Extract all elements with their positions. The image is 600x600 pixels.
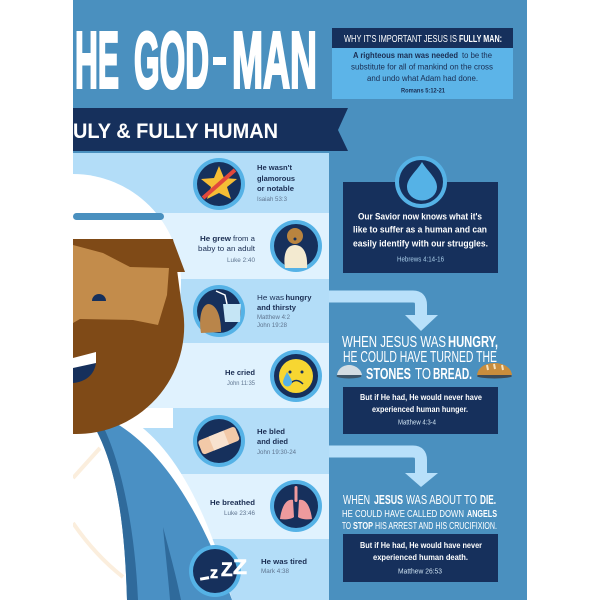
heading: hungry	[342, 336, 498, 379]
callout: death	[343, 534, 498, 582]
row 2: grew: baby to an adult	[198, 244, 256, 253]
heading: hungry: BREAD.	[433, 366, 472, 383]
heading: hungry: HE COULD HAVE TURNED THE	[343, 349, 497, 366]
callout: our savior	[343, 156, 498, 273]
row 6: breathed	[210, 480, 322, 532]
callout: our savior: Hebrews 4:14-16	[397, 256, 444, 264]
callout: death: experienced human death.	[373, 552, 468, 562]
beard	[73, 239, 184, 434]
eye	[92, 294, 106, 301]
heading: about to die: HIS ARREST AND HIS CRUCIFIXION.	[375, 521, 497, 532]
row 2: grew: Luke 2:40	[227, 257, 255, 264]
row 2: grew: from a	[233, 234, 256, 243]
row 4: cried: He cried	[225, 368, 255, 377]
heading: about to die: WAS ABOUT TO	[406, 492, 477, 507]
blue page background	[73, 0, 527, 600]
face skin	[73, 245, 169, 325]
heading: about to die: ANGELS	[467, 508, 497, 520]
callout: death: Matthew 26:53	[398, 568, 442, 576]
callout: our savior: easily identify with our struggles.	[353, 238, 488, 250]
callout: our savior: like to suffer as a human and can	[353, 224, 487, 236]
heading: about to die: DIE.	[480, 492, 496, 507]
sash	[95, 421, 232, 600]
turban	[73, 174, 181, 295]
arrow: hungry	[329, 296, 438, 331]
banner: ULY & FULLY HUMAN	[73, 120, 278, 143]
icon: bandage	[193, 415, 245, 467]
title: HE	[75, 16, 119, 104]
panel body: to be the	[462, 51, 493, 60]
icon: sleeping zzz: Z	[221, 560, 233, 581]
panel body: Romans 5:12-21	[401, 88, 446, 94]
row 7: tired: He was tired	[261, 557, 307, 566]
icon: crossed star	[193, 158, 245, 210]
icon: stone	[336, 365, 362, 378]
row 1: not glamorous: glamorous	[257, 174, 295, 183]
icon: bread and water	[193, 285, 245, 337]
callout: hunger: Matthew 4:3-4	[398, 420, 436, 426]
figure: Jesus	[73, 174, 232, 600]
banner	[73, 108, 348, 151]
row 3: hungry: John 19:28	[257, 322, 287, 329]
text: MAN	[232, 16, 317, 104]
callout: death: But if He had, He would have never	[360, 540, 483, 550]
icon: crying face	[270, 350, 322, 402]
callout: our savior: Our Savior now knows what it's	[358, 212, 482, 222]
row 6: breathed: Luke 23:46	[224, 510, 255, 517]
title	[76, 30, 316, 90]
row 4: cried	[225, 350, 322, 402]
row 5: bled: John 19:30-24	[257, 449, 296, 456]
panel header	[332, 28, 513, 48]
heading: about to die: JESUS	[374, 492, 403, 507]
row 5: bled	[193, 415, 296, 467]
icon: water drop	[395, 156, 447, 208]
heading: about to die: HE COULD HAVE CALLED DOWN	[342, 508, 464, 520]
panel body: A righteous man was needed	[353, 51, 458, 60]
row 3: hungry: He was	[257, 293, 284, 302]
panel body: substitute for all of mankind on the cross	[351, 62, 493, 72]
icon: sleeping zzz: z	[210, 565, 218, 582]
icon: lungs	[270, 480, 322, 532]
row 7: tired	[189, 545, 307, 597]
row 3: hungry: and thirsty	[257, 303, 297, 312]
panel header: FULLY MAN:	[459, 33, 502, 45]
callout: hunger	[343, 387, 498, 434]
robe	[73, 408, 232, 600]
icon: bread	[477, 363, 512, 378]
hair fringe	[173, 240, 185, 272]
row 7: tired: Mark 4:38	[261, 568, 289, 575]
panel: why fully man	[332, 28, 513, 99]
row 3: hungry	[193, 285, 312, 337]
row 5: bled: He bled	[257, 427, 285, 436]
row bands	[73, 153, 329, 600]
panel body: and undo what Adam had done.	[367, 74, 478, 83]
heading: about to die: STOP	[353, 521, 373, 532]
row 6: breathed: He breathed	[210, 498, 255, 507]
row 5: bled: and died	[257, 437, 288, 446]
arrow: die	[329, 452, 438, 487]
callout: hunger: experienced human hunger.	[372, 404, 468, 414]
heading: hungry: HUNGRY,	[448, 334, 498, 351]
row 1: not glamorous	[193, 158, 295, 210]
row 2: grew: He grew	[200, 234, 231, 243]
title: GOD	[134, 16, 209, 104]
icon: sleeping zzz: Z	[233, 556, 247, 579]
mouth	[73, 352, 96, 383]
heading: hungry: TO	[415, 366, 431, 383]
row 3: hungry: hungry	[286, 293, 312, 302]
heading: about to die: WHEN	[343, 492, 370, 507]
row 1: not glamorous: or notable	[257, 184, 294, 193]
heading: hungry: WHEN JESUS WAS	[342, 334, 446, 351]
icon: sleeping zzz	[189, 545, 247, 597]
heading: hungry: STONES	[366, 366, 411, 383]
icon: baby	[270, 220, 322, 272]
panel header: WHY IT'S IMPORTANT JESUS IS	[344, 33, 457, 45]
panel body	[332, 48, 513, 99]
row 4: cried: John 11:35	[227, 380, 255, 387]
row 2: grew	[198, 220, 322, 272]
row 1: not glamorous: He wasn't	[257, 163, 292, 172]
row 3: hungry: Matthew 4:2	[257, 314, 290, 321]
heading: about to die	[342, 495, 497, 529]
callout: hunger: But if He had, He would never have	[360, 392, 482, 402]
heading: about to die: TO	[342, 521, 351, 532]
row 1: not glamorous: Isaiah 53:3	[257, 196, 287, 203]
